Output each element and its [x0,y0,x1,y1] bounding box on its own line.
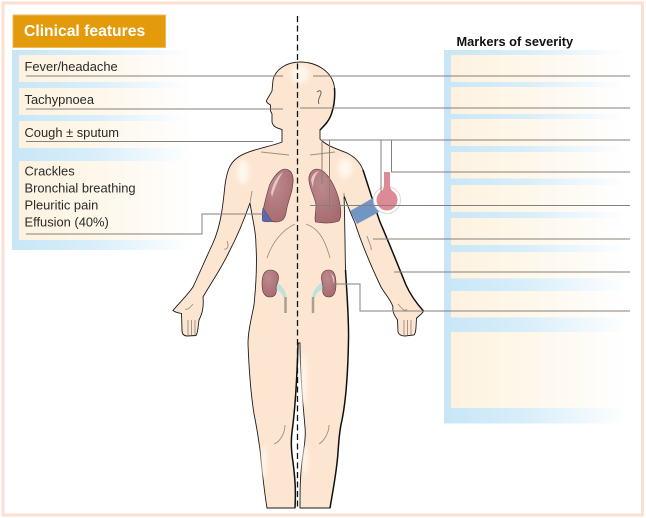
body highlights [237,65,352,478]
panel: clinical features [12,50,194,250]
text: fever/headache: Fever/headache [24,59,118,74]
heading: clinical features: Clinical features [24,23,145,40]
text: chest signs: Bronchial breathing [24,180,136,196]
icon: left lung with effusion [262,169,293,222]
panel: markers of severity [444,50,628,424]
midline dashed [296,16,298,510]
icon: left kidney [262,270,286,313]
icon: thermometer [374,172,400,214]
icon: right kidney [312,270,336,313]
text: chest signs: Crackles [24,164,75,178]
finger lines [188,320,411,335]
heading: markers of severity: Markers of severity [456,34,574,49]
text: chest signs: Pleuritic pain [24,198,98,212]
heavy contour right side [291,88,424,508]
icon: right lung [309,169,341,223]
icon: blood pressure cuff [350,198,379,224]
icon: ear [317,91,321,104]
leader lines [26,76,630,311]
anatomy creases [185,152,407,444]
human body figure [173,62,424,508]
text: chest signs: Effusion (40%) [24,214,109,230]
text: cough: Cough ± sputum [24,125,119,140]
heading: clinical features [13,15,166,48]
text: chest signs [24,164,136,230]
text: tachypnoea: Tachypnoea [24,92,95,107]
